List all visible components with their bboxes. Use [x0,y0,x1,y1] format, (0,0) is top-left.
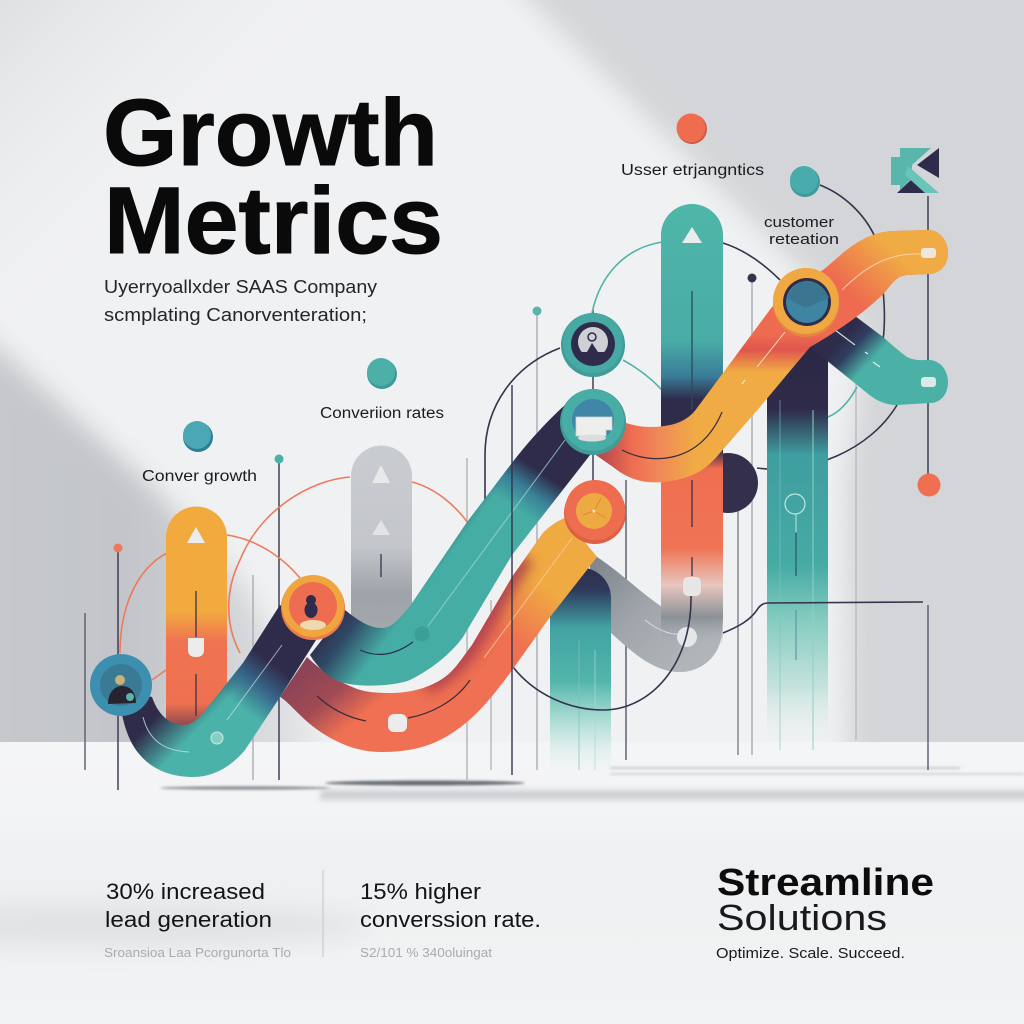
node: teal with figure [561,313,625,377]
title: Metrics [104,168,443,274]
ribbon: teal middle [310,405,590,686]
brand block [716,862,934,962]
label: customer retention: reteation [769,231,839,248]
ribbon: coral lower [280,518,597,752]
lower connector lines [513,596,923,710]
pillar: lower teal [550,567,611,790]
guide line over ribbons [511,385,513,775]
label: customer retention [764,214,839,248]
node: coral with amber core [564,480,626,544]
title: Growth [103,80,438,186]
logo mark [891,148,939,193]
pillar: right dark to teal [767,340,828,760]
stat: conversion rate: converssion rate. [360,907,541,932]
ribbon: gray [590,557,722,672]
vertical guide lines [85,196,928,790]
node: teal with document [560,389,626,455]
ribbon: teal left [120,605,316,777]
label: conversion rates: Converiion rates [320,405,444,422]
subtitle [104,277,377,325]
title [103,80,443,274]
stat: lead generation [104,879,291,960]
stat: conversion rate: S2/101 % 340oluingat [360,945,492,960]
ribbon details on gray [645,620,697,647]
node: user icon blue [90,654,152,716]
label: user engagement: Usser etrjangntics [621,162,764,179]
stat: conversion rate [360,879,541,960]
pillar: gray [351,446,412,640]
pillar: tall teal to coral [661,204,723,645]
subtitle: scmplating Canorventeration; [104,305,367,325]
ribbon: coral to amber upper [593,230,948,482]
stat: lead generation: lead generation [105,907,272,932]
node: amber with envelope [773,268,839,337]
brand block: Solutions [717,897,887,938]
node: user icon amber [281,575,345,640]
label: conver growth: Conver growth [142,468,257,485]
stat: lead generation: 30% increased [106,879,265,904]
divider [322,870,324,957]
stat: lead generation: Sroansioa Laa Pcorgunorta Tlo [104,945,291,960]
dark half circle behind pillars [698,453,758,513]
ribbon: teal right [810,307,948,405]
label: customer retention: customer [764,214,834,231]
brand block: Streamline [717,862,934,904]
stat: conversion rate: 15% higher [360,879,481,904]
brand block: Optimize. Scale. Succeed. [716,945,905,962]
floating dots [114,114,940,552]
connector arcs [120,185,897,680]
subtitle: Uyerryoallxder SAAS Company [104,277,377,297]
pillar: amber [166,506,227,730]
